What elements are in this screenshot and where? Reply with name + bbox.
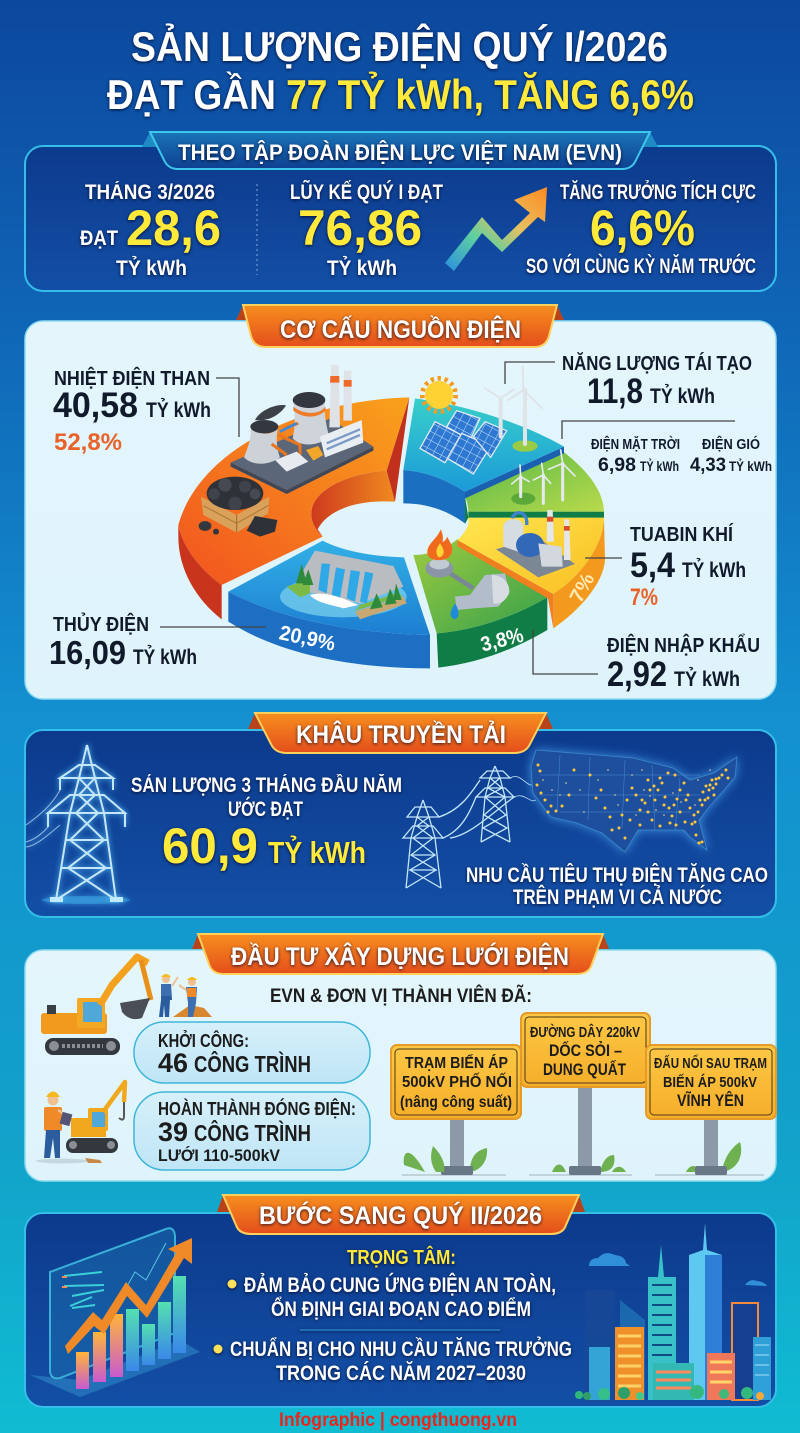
- stat: cumulative: TỶ kWh: [327, 257, 397, 280]
- icon: large pylon: [26, 745, 130, 904]
- label on slice: 3,8%: 3,8%: [478, 624, 526, 657]
- sign: Pho Noi: TRẠM BIẾN ÁP: [405, 1053, 508, 1072]
- panel: EVN summary: [25, 132, 776, 291]
- callout: completed: LƯỚI 110-500kV: [158, 1146, 281, 1165]
- chart: 3D donut: [178, 365, 605, 668]
- slice: solar: [403, 398, 564, 523]
- footer credit: Infographic | congthuong.vn: [279, 1410, 517, 1431]
- sign: Doc Soi: [521, 1013, 650, 1175]
- label: renewables: TỶ kWh: [650, 385, 715, 408]
- icon: city skyline: [575, 1223, 771, 1402]
- heading ribbon: structure: CƠ CẤU NGUỒN ĐIỆN: [280, 314, 521, 344]
- callout: started: [134, 1022, 370, 1083]
- text: 3-month output: ƯỚC ĐẠT: [228, 797, 303, 821]
- text: demand: [466, 863, 768, 909]
- sign: Pho Noi: (nâng công suất): [400, 1094, 512, 1111]
- sign: Vinh Yen: ĐẤU NỐI SAU TRẠM: [654, 1054, 767, 1072]
- text: demand: TRÊN PHẠM VI CẢ NƯỚC: [513, 885, 722, 909]
- panel: transmission: [25, 713, 776, 917]
- label: imports: 2,92: [607, 655, 667, 694]
- label: solar and wind: TỶ kWh: [729, 458, 772, 474]
- text: focus: TRỌNG TÂM:: [347, 1245, 456, 1269]
- label: coal: 40,58: [53, 386, 138, 425]
- text: focus: TRONG CÁC NĂM 2027–2030: [276, 1362, 526, 1385]
- label: hydro: [49, 612, 197, 671]
- icon: dam: [280, 551, 407, 619]
- label: hydro: THỦY ĐIỆN: [53, 612, 149, 636]
- panel: Q2 outlook: [25, 1195, 776, 1407]
- slice: hydro: [228, 541, 430, 668]
- heading ribbon: Q2: BƯỚC SANG QUÝ II/2026: [259, 1200, 542, 1230]
- sign: Vinh Yen: BIẾN ÁP 500kV: [663, 1074, 757, 1091]
- label: solar and wind: 6,98: [598, 455, 636, 476]
- icon: wind turbines top: [485, 367, 542, 452]
- text: focus: ỔN ĐỊNH GIAI ĐOẠN CAO ĐIỂM: [271, 1297, 531, 1321]
- label: solar and wind: 4,33: [690, 455, 726, 476]
- icon: growth chart board: [30, 1228, 200, 1397]
- title: SẢN LƯỢNG ĐIỆN QUÝ I/2026: [131, 22, 668, 70]
- title: ĐẠT GẦN 77 TỶ kWh, TĂNG 6,6%: [107, 70, 694, 118]
- stat: cumulative: LŨY KẾ QUÝ I ĐẠT: [290, 180, 443, 204]
- text: 3-month output: [131, 774, 402, 874]
- icon: gas plant: [496, 510, 575, 577]
- panel: power source structure: [25, 305, 776, 699]
- sign: Doc Soi: ĐƯỜNG DÂY 220kV: [530, 1023, 640, 1041]
- label: renewables: 11,8: [587, 372, 643, 411]
- icon: solar panels: [420, 411, 507, 474]
- label: renewables: NĂNG LƯỢNG TÁI TẠO: [562, 352, 752, 375]
- label: hydro: TỶ kWh: [133, 646, 197, 669]
- label: coal: TỶ kWh: [146, 399, 211, 422]
- label: solar and wind: TỶ kWh: [640, 458, 679, 474]
- text: focus: ĐẢM BẢO CUNG ỨNG ĐIỆN AN TOÀN,: [244, 1273, 556, 1297]
- label: gas turbine: 7%: [630, 584, 658, 611]
- icon: flame and pipe: [425, 529, 509, 619]
- heading ribbon: investment: [192, 934, 609, 974]
- label: gas turbine: TỶ kWh: [682, 559, 746, 582]
- callout: completed: CÔNG TRÌNH: [194, 1119, 311, 1146]
- stat: March: TỶ kWh: [116, 257, 187, 280]
- stat: cumulative: 76,86: [298, 200, 422, 256]
- slice: gas turbine: [457, 518, 605, 628]
- label: gas turbine: TUABIN KHÍ: [630, 523, 734, 546]
- icon: coal power plant: [231, 365, 373, 494]
- label: renewables: [562, 352, 752, 411]
- label: gas turbine: 5,4: [630, 546, 675, 585]
- label: coal: [53, 366, 211, 456]
- sign: Doc Soi: DỐC SỎI –: [549, 1040, 622, 1060]
- text: 3-month output: TỶ kWh: [268, 835, 366, 870]
- callout: completed: [134, 1092, 370, 1170]
- icon: coal crate: [199, 477, 277, 537]
- callout: started: KHỞI CÔNG:: [158, 1030, 249, 1051]
- label: imports: TỶ kWh: [674, 668, 740, 691]
- text: focus: CHUẨN BỊ CHO NHU CẦU TĂNG TRƯỞNG: [230, 1337, 572, 1361]
- panel: grid investment: [25, 934, 776, 1181]
- stat: March: 28,6: [126, 200, 221, 256]
- heading ribbon: structure: [236, 305, 564, 347]
- heading ribbon: investment: ĐẦU TƯ XÂY DỰNG LƯỚI ĐIỆN: [231, 941, 569, 971]
- label: solar and wind: [591, 435, 772, 476]
- callout: completed: 39: [158, 1117, 188, 1147]
- label on slice: 7%: 7%: [566, 569, 599, 606]
- icon: worker and excavator: [36, 1082, 125, 1164]
- text: EVN members: EVN & ĐƠN VỊ THÀNH VIÊN ĐÃ:: [270, 985, 532, 1007]
- slice: imports: [413, 539, 547, 668]
- sign: Pho Noi: 500kV PHỐ NỐI: [402, 1071, 512, 1091]
- sign: Vinh Yen: VĨNH YÊN: [677, 1090, 744, 1110]
- label: coal: 52,8%: [54, 429, 122, 456]
- heading ribbon: transmission: [248, 713, 553, 753]
- stat: cumulative: [290, 180, 443, 280]
- slice: wind: [465, 452, 604, 524]
- callout: started: 46: [158, 1048, 188, 1078]
- label on slice: 20,9%: 20,9%: [277, 621, 337, 656]
- label: gas turbine: [630, 523, 746, 611]
- icon: sun: [422, 378, 456, 412]
- stat: growth: 6,6%: [590, 200, 695, 256]
- text: 3-month output: 60,9: [162, 818, 258, 874]
- stat: growth: [526, 180, 756, 278]
- heading ribbon: transmission: KHÂU TRUYỀN TẢI: [296, 719, 506, 749]
- icon: growth arrow: [445, 187, 547, 271]
- label: solar and wind: ĐIỆN MẶT TRỜI: [591, 435, 680, 453]
- heading: EVN: THEO TẬP ĐOÀN ĐIỆN LỰC VIỆT NAM (EVN): [178, 140, 622, 165]
- stat: March: [80, 181, 221, 280]
- title: [107, 22, 694, 118]
- sign: Doc Soi: DUNG QUẤT: [543, 1060, 626, 1079]
- sign: Pho Noi: [391, 1045, 521, 1175]
- label: imports: ĐIỆN NHẬP KHẨU: [607, 633, 760, 657]
- heading ribbon: Q2: [217, 1195, 585, 1234]
- label: coal: NHIỆT ĐIỆN THAN: [54, 366, 210, 390]
- icon: night-lights map: [531, 750, 737, 852]
- icon: small pylons with lines: [403, 766, 536, 888]
- label: hydro: 16,09: [49, 634, 126, 671]
- text: focus: [214, 1245, 572, 1385]
- label: imports: [607, 633, 760, 694]
- icon: wind turbines small: [511, 450, 575, 505]
- leader lines: [160, 362, 735, 674]
- callout: started: CÔNG TRÌNH: [194, 1050, 311, 1077]
- text: 3-month output: SẢN LƯỢNG 3 THÁNG ĐẦU NĂM: [131, 774, 402, 797]
- stat: March: ĐẠT: [80, 227, 118, 250]
- sign: Vinh Yen: [646, 1045, 776, 1175]
- label: solar and wind: ĐIỆN GIÓ: [702, 435, 760, 453]
- icon: excavator and workers: [41, 957, 212, 1055]
- stat: March: THÁNG 3/2026: [85, 181, 215, 204]
- callout: completed: HOÀN THÀNH ĐÓNG ĐIỆN:: [158, 1098, 356, 1119]
- slice: coal: [178, 397, 409, 619]
